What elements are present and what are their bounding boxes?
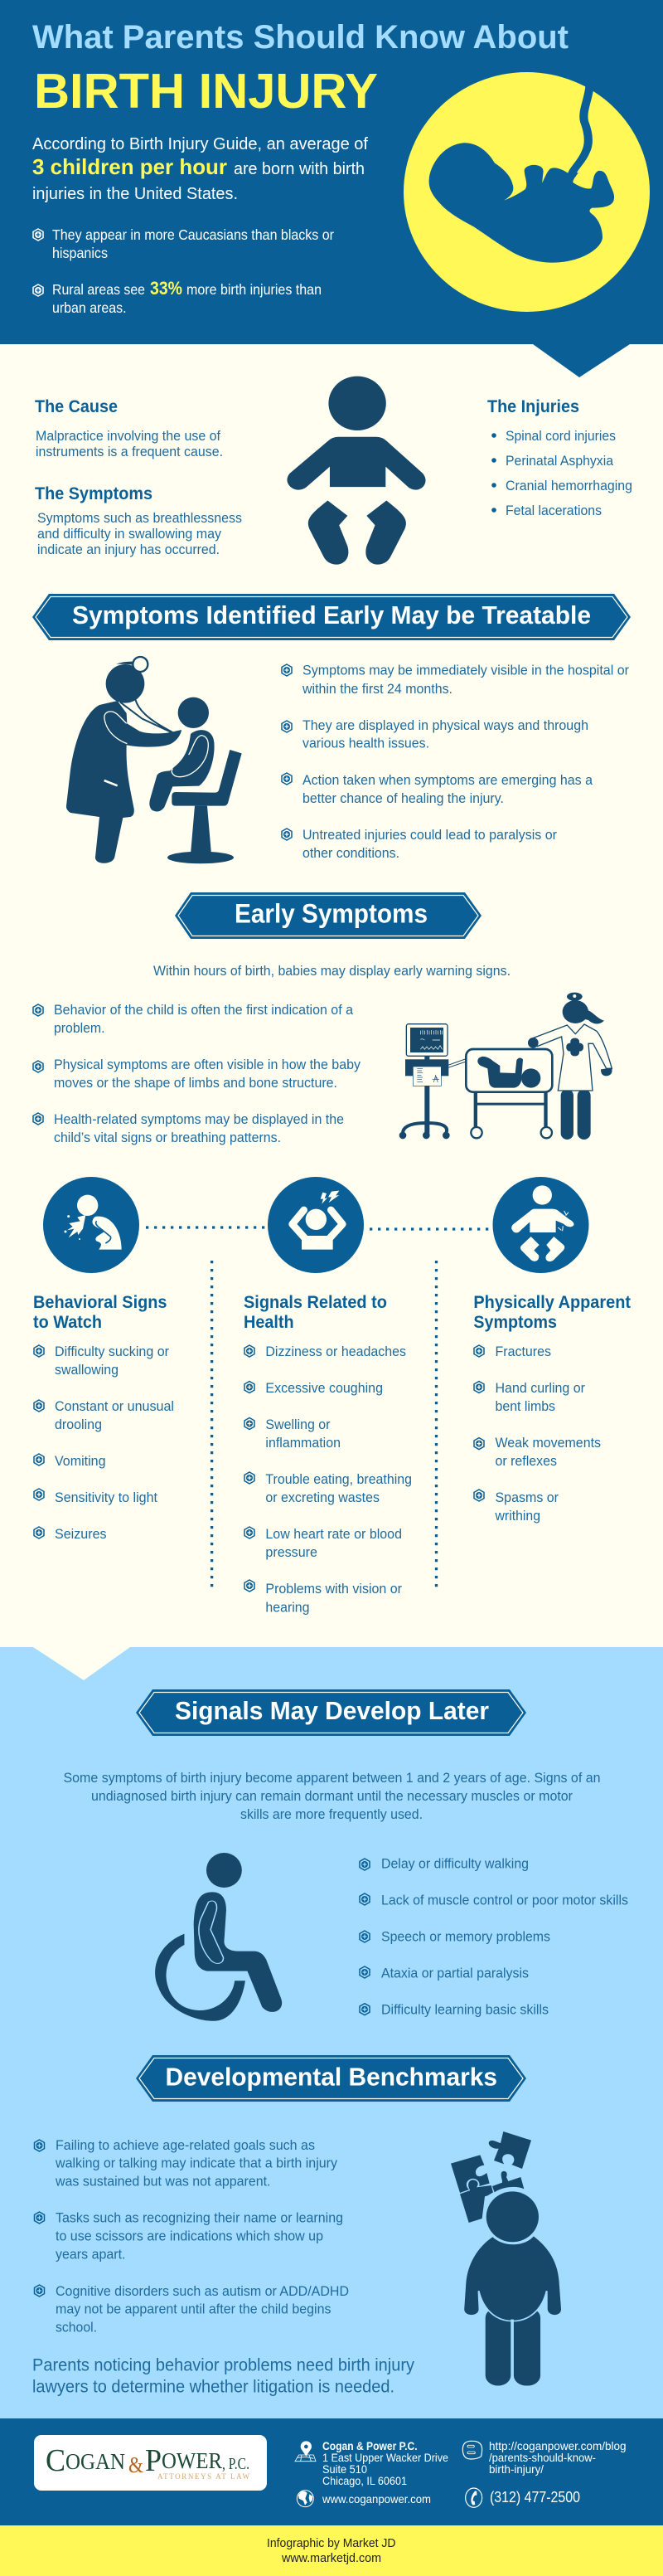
banner: signals may develop later (136, 1689, 526, 1736)
list: benchmark bullets (35, 2138, 349, 2335)
logo: Cogan & Power (34, 2435, 267, 2491)
text: address: Cogan & Power P.C. (322, 2439, 418, 2452)
list: early treatable bullets: within the first 24 months. (302, 682, 452, 697)
list: injuries: Perinatal Asphyxia (506, 454, 614, 469)
list: early symptom bullets: Health-related symptoms may be displayed in the (54, 1112, 344, 1127)
list: physical symptoms: Weak movements (496, 1436, 601, 1451)
text: url (489, 2439, 627, 2476)
intro text: injuries in the United States. (32, 184, 238, 203)
heading: physically apparent symptoms: Symptoms (473, 1312, 557, 1332)
heading: signals related to health (244, 1292, 387, 1332)
header bullets: hispanics (52, 245, 108, 261)
list: health signals: or excreting wastes (265, 1490, 380, 1505)
text: url: http://coganpower.com/blog (489, 2439, 627, 2452)
heading: the cause: The Cause (35, 396, 118, 416)
text: cause body: instruments is a frequent cause. (36, 445, 223, 459)
header bullets: 33% (150, 278, 182, 299)
panel: light blue section (0, 1647, 663, 2418)
text: cause body: Malpractice involving the use of (36, 429, 220, 444)
list: early treatable bullets: Symptoms may be immediately visible in the hospital or (302, 663, 629, 678)
list: behavioral signs: swallowing (55, 1363, 119, 1378)
list: later signal bullets: Delay or difficulty walking (381, 1857, 529, 1872)
logo: Cogan & Power: OWER (162, 2448, 222, 2473)
list: health signals (244, 1344, 412, 1616)
text: url: birth-injury/ (489, 2462, 544, 2476)
text: call to action (32, 2356, 414, 2397)
icon: doctor examining child (66, 657, 242, 863)
list: health signals: hearing (265, 1601, 310, 1616)
list: early treatable bullets: better chance of healing the injury. (302, 791, 504, 806)
list: benchmark bullets: walking or talking may indicate that a birth injury (55, 2156, 338, 2171)
list: later signal bullets: Ataxia or partial paralysis (381, 1966, 529, 1981)
list: physical symptoms: Fractures (496, 1344, 551, 1359)
list: physical symptoms: or reflexes (496, 1454, 557, 1469)
list: behavioral signs: Seizures (55, 1527, 107, 1542)
list: benchmark bullets: Cognitive disorders such as autism or ADD/ADHD (56, 2284, 349, 2299)
intro text (32, 134, 368, 203)
list: injuries: Fetal lacerations (506, 503, 602, 518)
text: address: 1 East Upper Wacker Drive (322, 2451, 448, 2464)
logo: Cogan & Power: P (145, 2443, 162, 2478)
list: benchmark bullets: Failing to achieve age-related goals such as (56, 2138, 315, 2153)
panel: physically apparent symptoms (473, 1292, 631, 1524)
list: early symptom bullets: moves or the shape of limbs and bone structure. (54, 1076, 337, 1091)
list: early symptom bullets: Physical symptoms are often visible in how the baby (54, 1057, 361, 1072)
text: call to action: Parents noticing behavior problems need birth injury (32, 2356, 414, 2375)
list: early treatable bullets: various health issues. (302, 736, 429, 751)
list: early treatable bullets: Action taken when symptoms are emerging has a (302, 773, 593, 788)
icon: vomiting child circle (43, 1177, 139, 1273)
list: health signals: Excessive coughing (265, 1381, 383, 1396)
list: early symptom bullets: child’s vital signs or breathing patterns. (54, 1130, 281, 1145)
heading: the symptoms: The Symptoms (35, 484, 152, 503)
icon: nurse with incubator and monitor (399, 993, 612, 1140)
list: behavioral signs: Sensitivity to light (55, 1490, 157, 1505)
banner: developmental benchmarks: Developmental Benchmarks (166, 2063, 497, 2092)
list: benchmark bullets: was sustained but was not apparent. (55, 2175, 270, 2190)
header bullets: They appear in more Caucasians than blacks or (52, 226, 334, 243)
header bullets (33, 226, 334, 316)
list: early symptom bullets: Behavior of the child is often the first indication of a (54, 1003, 354, 1018)
list: early treatable bullets: Untreated injuries could lead to paralysis or (302, 828, 557, 843)
logo: Cogan & Power: ATTORNEYS AT LAW (157, 2472, 250, 2481)
list: health signals: pressure (265, 1545, 317, 1560)
text: address: Suite 510 (322, 2462, 367, 2476)
list: health signals: Trouble eating, breathing (265, 1472, 412, 1487)
list: benchmark bullets: may not be apparent until after the child begins (56, 2302, 332, 2317)
panel: cream background (0, 344, 663, 1647)
list: benchmark bullets: to use scissors are indications which show up (56, 2229, 323, 2244)
list: physical symptoms: writhing (495, 1509, 540, 1524)
panel: behavioral signs (33, 1292, 174, 1542)
heading: behavioral signs (33, 1292, 167, 1332)
panel: the cause (35, 396, 223, 459)
banner: developmental benchmarks (136, 2055, 526, 2102)
icon: map pin (295, 2441, 316, 2462)
heading: behavioral signs: Behavioral Signs (33, 1292, 167, 1312)
logo: Cogan & Power: C (46, 2443, 65, 2478)
icon: baby with arm injury circle (492, 1177, 588, 1273)
title: What Parents Should Know About (32, 19, 569, 56)
list: injuries (491, 429, 632, 518)
text: symptoms body: indicate an injury has occurred. (37, 542, 220, 557)
icon: headache circle (268, 1177, 364, 1273)
list: physical symptoms: bent limbs (496, 1399, 555, 1414)
list: health signals: Low heart rate or blood (265, 1527, 402, 1542)
list: later signal bullets (360, 1857, 628, 2018)
banner: symptoms identified early: Symptoms Identified Early May be Treatable (72, 600, 591, 629)
banner: signals may develop later: Signals May Develop Later (175, 1696, 489, 1725)
list: physical symptoms (474, 1344, 601, 1524)
icon: baby silhouette (287, 377, 426, 565)
list: benchmark bullets: years apart. (56, 2248, 126, 2263)
list: early treatable bullets: other conditions. (302, 846, 399, 861)
text: early symptoms intro: Within hours of birth, babies may display early warning signs. (153, 964, 511, 979)
logo: Cogan & Power: , P.C. (222, 2455, 249, 2473)
header bullets: urban areas. (52, 299, 126, 316)
banner: early symptoms: Early Symptoms (235, 899, 428, 929)
text: symptoms body (37, 511, 242, 557)
list: physical symptoms: Hand curling or (496, 1381, 585, 1396)
list: later signal bullets: Difficulty learning basic skills (381, 2003, 549, 2018)
heading: signals related to health: Signals Related to (244, 1292, 387, 1312)
logo: Cogan & Power: & (128, 2452, 143, 2477)
list: behavioral signs: drooling (55, 1417, 102, 1432)
dotted column dividers (212, 1261, 436, 1587)
icon: person with puzzle pieces (451, 2131, 561, 2386)
heading: physically apparent symptoms: Physically Apparent (473, 1292, 631, 1312)
icon: globe (297, 2491, 313, 2507)
list: early treatable bullets (282, 663, 629, 861)
list: later signal bullets: Speech or memory problems (381, 1930, 550, 1945)
intro text: According to Birth Injury Guide, an average of (32, 134, 368, 153)
text: phone: (312) 477-2500 (490, 2488, 580, 2506)
intro text: 3 children per hour (32, 154, 227, 179)
text: cause body (36, 429, 223, 459)
heading: signals related to health: Health (244, 1312, 294, 1332)
text: later signals paragraph: Some symptoms of birth injury become apparent between 1 and 2 years of age. Signs of an (63, 1771, 600, 1786)
icon: fetus in yellow circle (404, 72, 650, 312)
list: behavioral signs: Difficulty sucking or (55, 1344, 169, 1359)
icon: wheelchair user (155, 1853, 282, 2021)
list: early symptom bullets (33, 1003, 361, 1145)
list: behavioral signs (34, 1344, 174, 1542)
list: later signal bullets: Lack of muscle control or poor motor skills (381, 1893, 628, 1908)
header bullets: Rural areas see (52, 281, 145, 298)
list: behavioral signs: Vomiting (55, 1454, 106, 1469)
text: later signals paragraph: skills are more frequently used. (240, 1807, 423, 1822)
panel: the symptoms (35, 484, 242, 557)
text: website: www.coganpower.com (322, 2492, 431, 2506)
list: benchmark bullets: Tasks such as recognizing their name or learning (56, 2211, 343, 2226)
title: BIRTH INJURY (34, 64, 378, 119)
list: early symptom bullets: problem. (54, 1021, 104, 1036)
banner: early symptoms (175, 892, 482, 939)
list: early treatable bullets: They are displayed in physical ways and through (302, 718, 588, 733)
list: physical symptoms: Spasms or (496, 1490, 559, 1505)
dotted connector (146, 1227, 489, 1229)
panel: header (0, 0, 663, 377)
panel: footer (0, 2418, 663, 2525)
panel: credits: Infographic by Market JD (267, 2536, 396, 2550)
list: health signals: Problems with vision or (265, 1582, 402, 1597)
list: behavioral signs: Constant or unusual (55, 1399, 174, 1414)
list: health signals: Swelling or (265, 1417, 331, 1432)
title (32, 19, 569, 119)
logo: Cogan & Power: OGAN (65, 2449, 125, 2474)
heading: physically apparent symptoms (473, 1292, 631, 1332)
heading: the injuries: The Injuries (487, 396, 579, 416)
banner: symptoms identified early (32, 594, 631, 640)
text: address: Chicago, IL 60601 (322, 2474, 407, 2487)
text: address (322, 2439, 448, 2487)
list: injuries: Cranial hemorrhaging (506, 479, 632, 493)
text: later signals paragraph (63, 1771, 600, 1822)
list: health signals: inflammation (265, 1436, 341, 1451)
list: injuries: Spinal cord injuries (506, 429, 616, 444)
icon: web blog (462, 2441, 482, 2459)
list: benchmark bullets: school. (56, 2321, 97, 2335)
text: later signals paragraph: undiagnosed birth injury can remain dormant until the necessary muscles or motor (91, 1789, 573, 1804)
header bullets: more birth injuries than (186, 281, 322, 298)
text: symptoms body: and difficulty in swallowing may (37, 527, 222, 542)
list: health signals: Dizziness or headaches (265, 1344, 406, 1359)
heading: behavioral signs: to Watch (33, 1312, 102, 1332)
panel: signals related to health (244, 1292, 412, 1616)
icon: phone (466, 2488, 482, 2507)
text: url: /parents-should-know- (489, 2451, 596, 2464)
panel: credits: www.marketjd.com (281, 2551, 381, 2565)
intro text: are born with birth (234, 159, 365, 178)
text: symptoms body: Symptoms such as breathlessness (37, 511, 242, 526)
panel: credits (0, 2525, 663, 2576)
text: call to action: lawyers to determine whether litigation is needed. (32, 2378, 394, 2397)
panel: the injuries (487, 396, 632, 518)
